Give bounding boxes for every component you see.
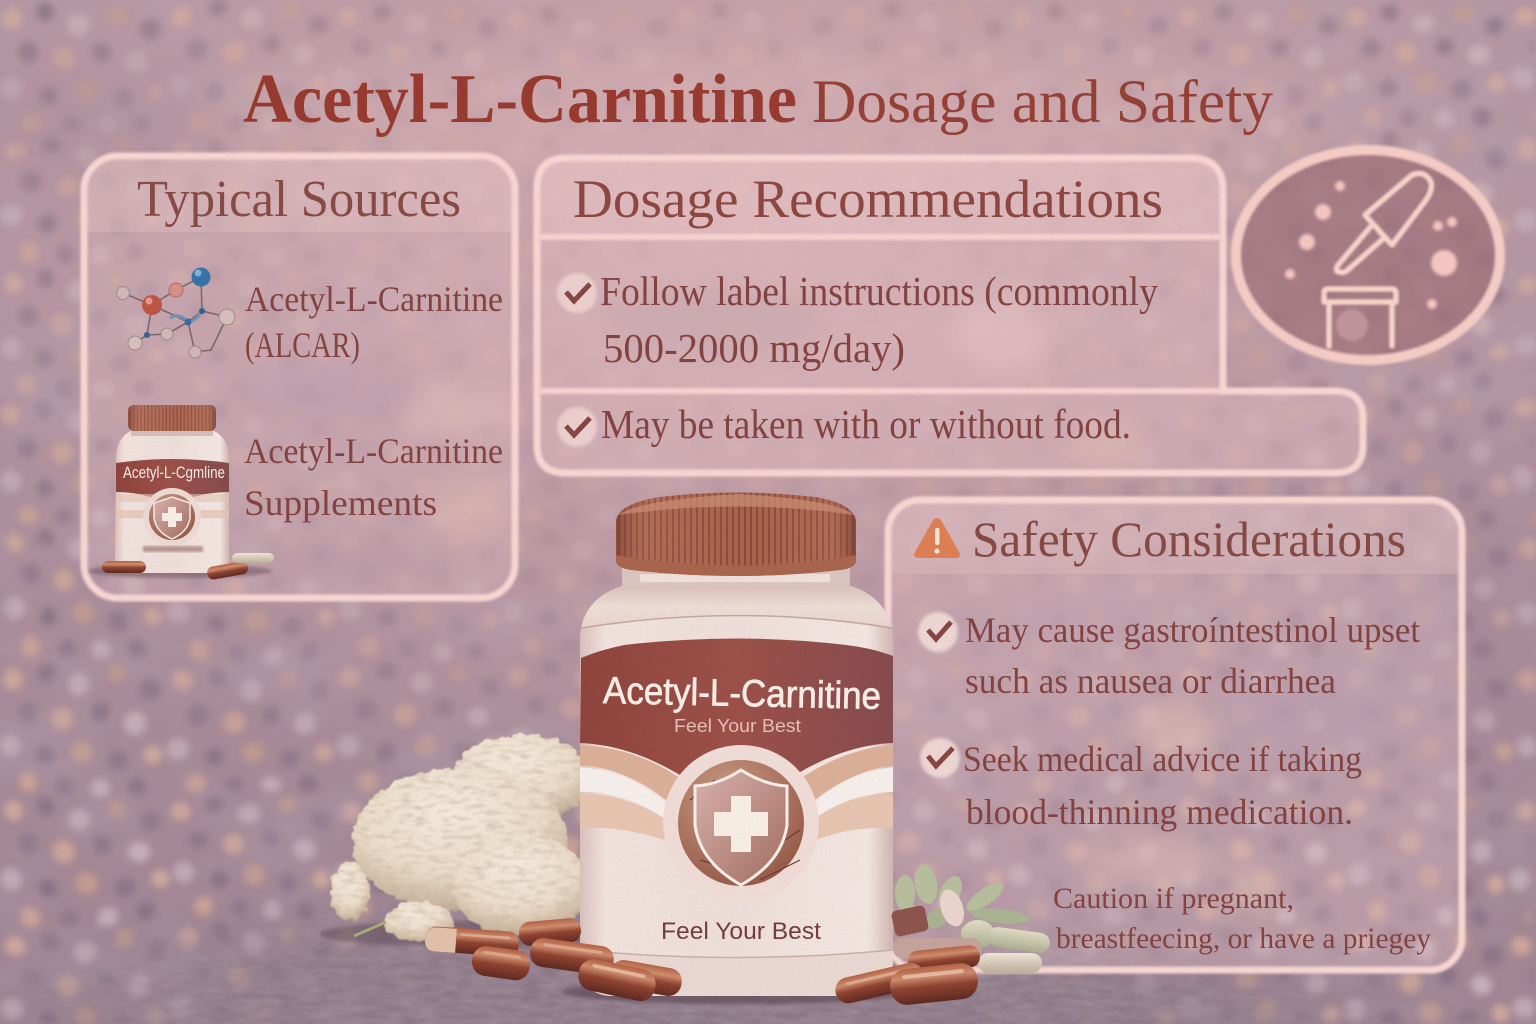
bullet: blood-thinning medication: [920, 738, 1362, 832]
heading: dosage recommendations: Dosage Recommendations: [573, 169, 1163, 229]
text: caution: Caution if pregnant,: [1053, 882, 1294, 915]
title: Dosage and Safety: [812, 69, 1273, 136]
bullet: follow label: Follow label instructions (commonly: [600, 268, 1158, 314]
capsule group right: [833, 905, 981, 1007]
bullet: gastrointestinal upset: May cause gastroíntestinol upset: [965, 610, 1420, 650]
title: [243, 61, 1273, 138]
label swooshes: [580, 745, 893, 842]
bullet: follow label: [557, 268, 1158, 371]
capsule group left: [424, 917, 684, 1004]
heading: typical sources: Typical Sources: [137, 171, 461, 228]
text: supplements: [244, 431, 503, 523]
bullet: blood-thinning medication: Seek medical advice if taking: [963, 739, 1362, 779]
text: ALCAR: [245, 279, 503, 365]
text: ALCAR: Acetyl-L-Carnitine: [245, 279, 503, 319]
bullet: gastrointestinal upset: such as nausea or diarrhea: [965, 661, 1336, 701]
bottle neck: [622, 560, 850, 590]
illustration: lion's mane mushrooms: [320, 734, 620, 947]
icon: shield badge: [663, 745, 819, 901]
bullet: with or without food: May be taken with or without food.: [601, 401, 1131, 447]
bullet: gastrointestinal upset: [918, 610, 1420, 701]
label text: tagline: Feel Your Best: [674, 716, 801, 736]
illustration: capsules: [424, 905, 981, 1007]
title: Acetyl-L-Carnitine: [243, 61, 797, 138]
label band: [580, 638, 893, 775]
icon: small supplement bottle: [88, 405, 274, 580]
icon: dropper and jar in oval: [1236, 150, 1500, 360]
panel: dosage recommendations: [537, 158, 1363, 473]
icon: molecule: [116, 268, 235, 358]
floor: [4, 902, 1365, 1024]
bottle cap: [616, 492, 856, 576]
illustration: main supplement bottle: [562, 492, 912, 1004]
text: supplements: Acetyl-L-Carnitine: [244, 431, 503, 471]
bottom tagline: Feel Your Best: [661, 918, 821, 945]
bullet: blood-thinning medication: blood-thinning medication.: [966, 792, 1353, 832]
bullet: follow label: 500-2000 mg/day): [603, 325, 905, 371]
bottle body: [580, 586, 893, 996]
icon: warning triangle: [914, 518, 960, 558]
soft light patches behind panels: [240, 290, 1390, 916]
panel: safety considerations: [888, 500, 1462, 970]
panel: typical sources: [84, 156, 515, 598]
text: caution: [1053, 882, 1431, 955]
illustration: herbs: [895, 862, 1051, 973]
heading: safety considerations: Safety Considerations: [972, 511, 1406, 567]
text: ALCAR: (ALCAR): [245, 325, 360, 365]
icon: small supplement bottle: Acetyl-L-Cgmline: [123, 463, 225, 482]
text: caution: breastfeecing, or have a priegey: [1056, 922, 1431, 955]
text: supplements: Supplements: [244, 483, 437, 523]
label text: product name: Acetyl-L-Carnitine: [603, 670, 881, 718]
